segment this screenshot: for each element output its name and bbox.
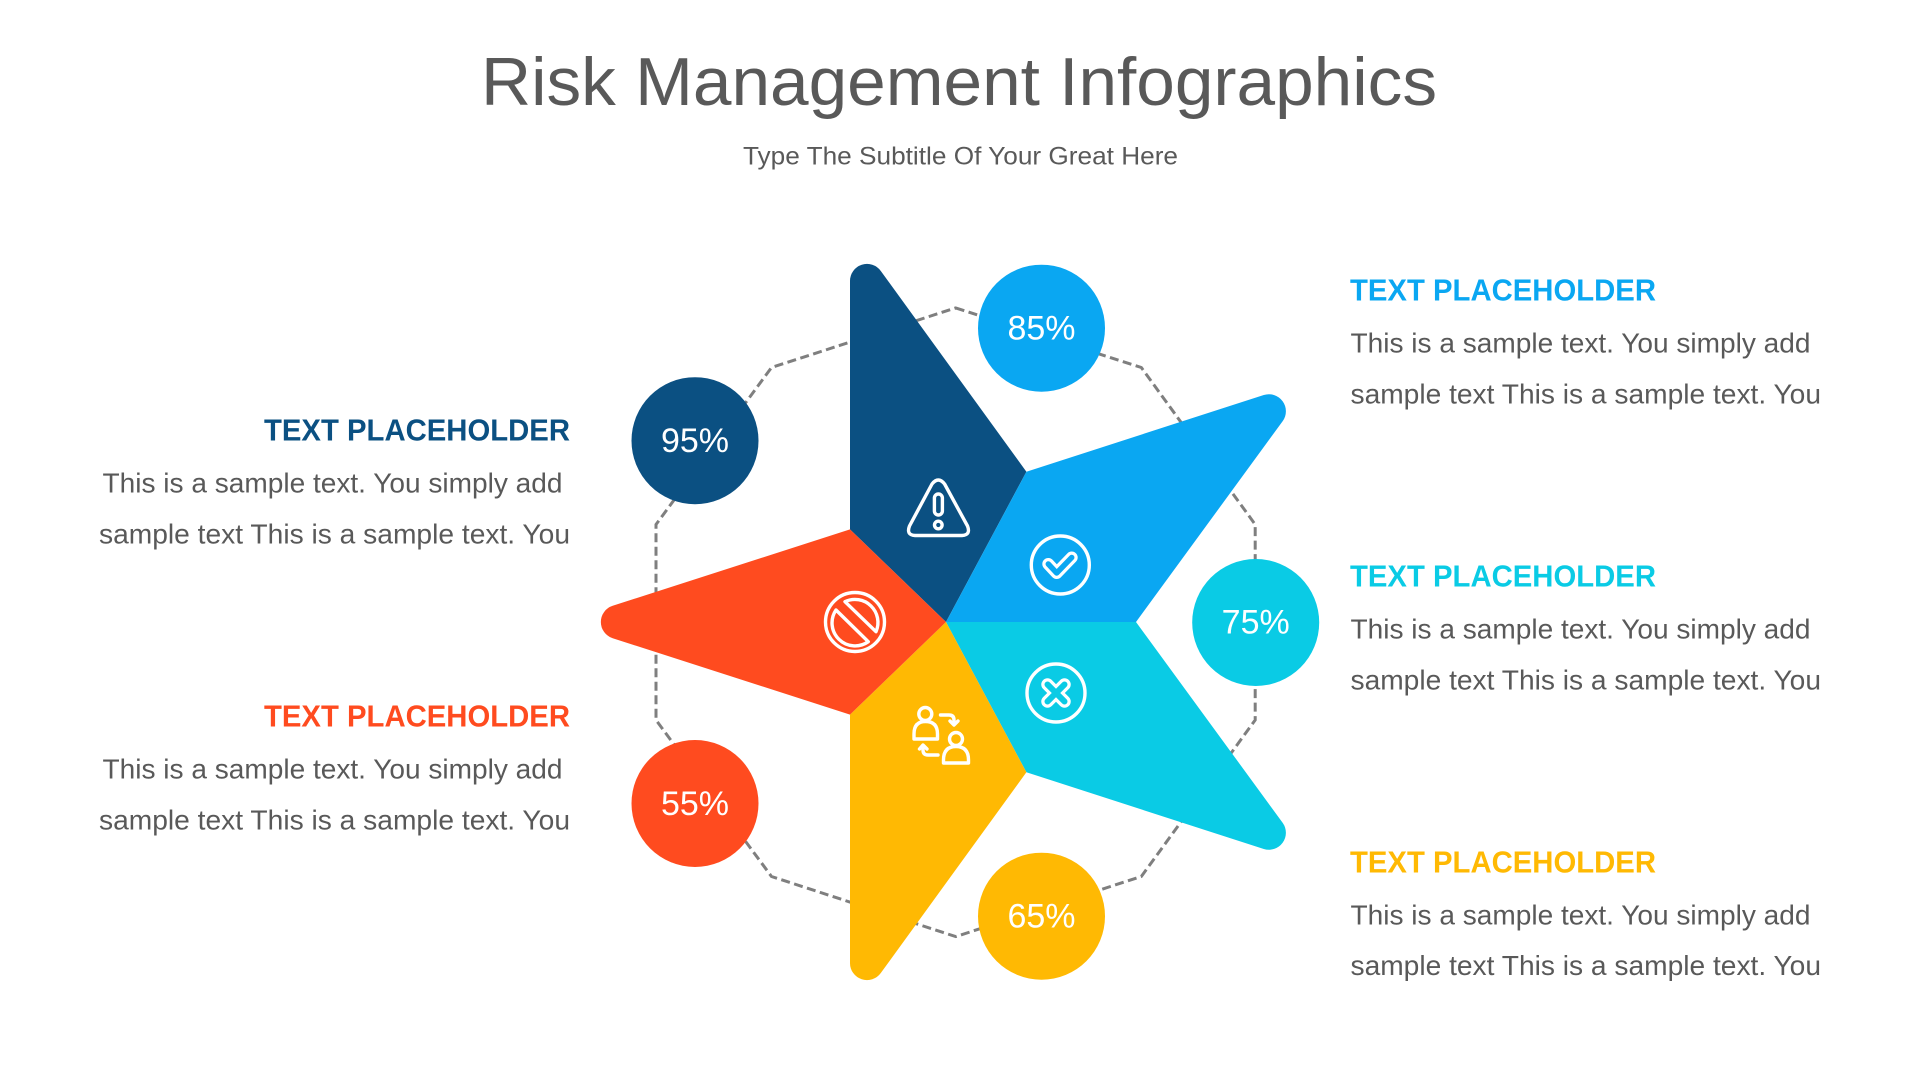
icon: prohibited sign <box>826 592 884 652</box>
circle: 85%: 85% <box>1007 310 1076 348</box>
text block: blue right: This is a sample text. You simply add <box>1350 328 1810 359</box>
circle: 55% <box>632 740 758 867</box>
text block: red left: TEXT PLACEHOLDER <box>264 699 570 734</box>
text block: blue right <box>1350 273 1821 409</box>
star arm: navy <box>850 264 1026 622</box>
text block: red left: This is a sample text. You simply add <box>102 753 562 784</box>
circle: 95% <box>632 377 758 504</box>
circle: 75%: 75% <box>1222 604 1290 642</box>
text block: yellow right: This is a sample text. You simply add <box>1350 900 1810 930</box>
icon: check in circle <box>1031 536 1089 594</box>
text block: yellow right: sample text This is a sample text. You <box>1350 950 1821 981</box>
text block: navy left: sample text This is a sample text. You <box>99 518 570 549</box>
circle: 95%: 95% <box>661 422 729 460</box>
circle: 65%: 65% <box>1007 898 1076 936</box>
text block: blue right: sample text This is a sample text. You <box>1350 378 1821 409</box>
icon: x in circle <box>1027 664 1085 722</box>
text block: teal right: sample text This is a sample text. You <box>1350 664 1821 695</box>
text block: navy left: TEXT PLACEHOLDER <box>264 413 570 448</box>
text block: teal right: This is a sample text. You simply add <box>1350 614 1810 645</box>
text block: teal right: TEXT PLACEHOLDER <box>1350 558 1656 594</box>
text block: red left: sample text This is a sample text. You <box>99 804 570 835</box>
circle: 75% <box>1192 559 1319 686</box>
text block: teal right <box>1350 558 1821 695</box>
dashed decagon ring <box>656 308 1255 937</box>
star arm: yellow <box>850 622 1026 980</box>
icon: people exchange <box>914 708 968 763</box>
subtitle: Type The Subtitle Of Your Great Here <box>743 142 1178 170</box>
text block: red left <box>99 699 570 835</box>
text block: yellow right: TEXT PLACEHOLDER <box>1350 845 1656 880</box>
star arm: red <box>601 529 946 715</box>
star diagram <box>601 264 1286 980</box>
text block: yellow right <box>1350 845 1821 981</box>
circle: 65% <box>978 853 1105 980</box>
icon: warning triangle <box>909 480 968 536</box>
star arm: blue <box>946 394 1286 622</box>
text block: navy left <box>99 413 570 549</box>
title: Risk Management Infographics <box>481 44 1437 120</box>
text block: navy left: This is a sample text. You simply add <box>102 468 562 499</box>
text block: blue right: TEXT PLACEHOLDER <box>1350 273 1656 308</box>
star arm: teal <box>946 622 1286 850</box>
circle: 55%: 55% <box>661 785 729 823</box>
circle: 85% <box>978 265 1105 392</box>
